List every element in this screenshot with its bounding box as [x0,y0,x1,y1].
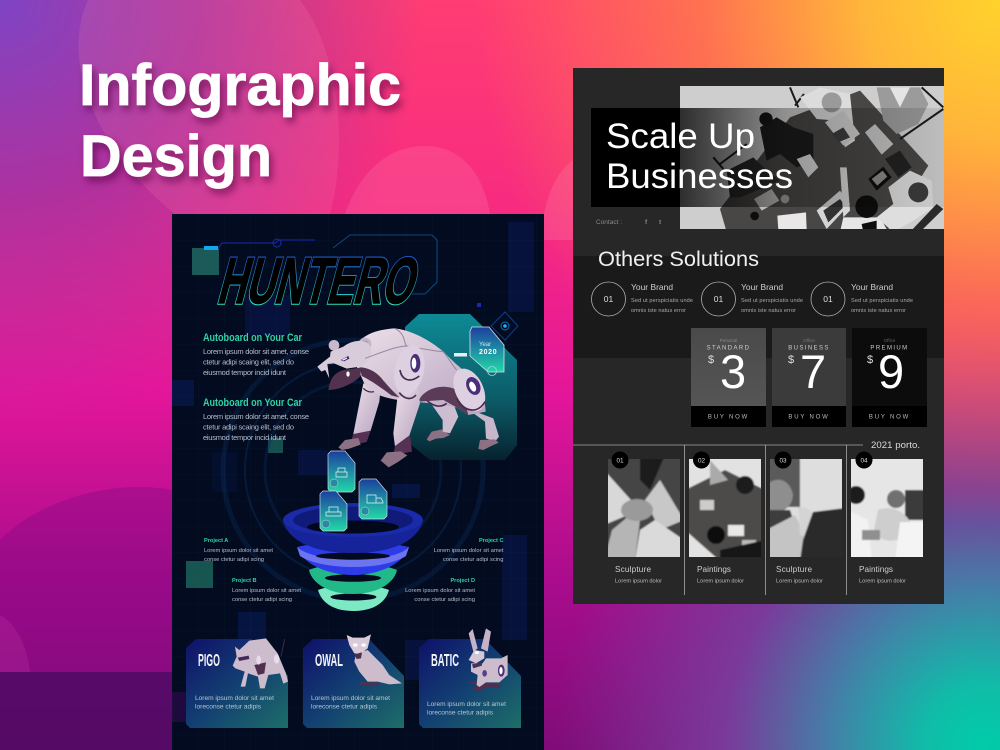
year tag [454,327,504,376]
card: Batic: Lorem ipsum dolor sit amet [427,701,506,708]
photo: high five [770,459,842,557]
badge 03 [774,452,792,468]
brand item two [702,282,803,316]
price card: premium [852,328,927,427]
price card: business: BUY NOW [788,414,830,420]
project A: Lorem ipsum dolor sit amet [204,548,273,554]
text block: autoboard two: ctetur adipi scaing elit, sed do [203,422,294,432]
price card: business: $ [788,354,794,366]
brand item two: 01 [714,294,723,304]
contact row: Contact : [596,219,622,226]
caption 1: Sculpture [615,565,651,574]
portfolio rule and label: 2021 porto. [871,440,920,451]
icon: robot owl [347,634,402,685]
hexagon behind bear [405,314,517,460]
brand item two: Sed ut perspiciatis unde [741,298,803,304]
badge 04: 04 [860,458,868,464]
project D: conse ctetur adipi scing [414,597,475,603]
brand item one: Sed ut perspiciatis unde [631,298,693,304]
brand item three [811,282,913,316]
card: Batic: BATIC [431,650,459,670]
price card: business [772,328,846,427]
icon: file card one [328,451,355,492]
title [79,53,401,189]
heading: HUNTERO: HUNTERO [212,245,427,318]
price card: business: 7 [800,345,826,398]
price card: premium: PREMIUM [870,346,909,352]
text block: autoboard one: Autoboard on Your Car [203,332,302,344]
project D: Project D [450,578,475,584]
price card: standard: BUY NOW [708,414,749,420]
icon: file card two [359,479,387,519]
caption 3: Lorem ipsum dolor [776,578,823,584]
title frame lines [204,235,437,294]
card: Batic: loreconse ctetur adipis [427,710,494,716]
price card: business: Office [803,338,815,343]
price card: standard: $ [708,354,714,366]
icon: file card three [320,491,347,531]
badge 02: 02 [698,458,705,464]
card: Owal [303,634,404,728]
project C: conse ctetur adipi scing [443,557,504,563]
brand item one: omnis iste natus error [631,308,686,314]
caption 1 [615,565,662,584]
price card: premium: $ [867,354,873,366]
text block: autoboard one: eiusmod tempor incid idunt [203,368,287,377]
text block: autoboard one: Lorem ipsum dolor sit amet, conse [203,347,309,356]
brand item three: Sed ut perspiciatis unde [851,298,913,304]
project B: Project B [232,578,257,584]
photo: office meeting [851,459,923,557]
photo: hands [608,459,680,557]
heading: Scale Up Businesses: Businesses [606,157,793,196]
icon: robot bear [317,328,499,467]
price card: standard: STANDARD [707,346,750,352]
panel: Scale Up Businesses [573,68,944,604]
project C: Project C [479,538,504,544]
project A [204,538,273,563]
project D: Lorem ipsum dolor sit amet [405,588,475,594]
caption 2: Lorem ipsum dolor [697,578,744,584]
contact row: t [659,219,662,226]
caption 1: Lorem ipsum dolor [615,578,662,584]
project B [232,578,301,603]
price card: premium: 9 [878,345,904,398]
card: Pigo: PIGO [198,650,220,670]
card: Pigo: loreconse ctetur adipis [195,704,262,710]
badge 01 [612,452,628,468]
heading: Scale Up Businesses: Scale Up [606,117,755,156]
brand item one: Your Brand [631,282,673,292]
brand item three: 01 [823,294,833,304]
caption 4 [859,565,906,584]
icon: robot rabbit [468,628,508,691]
heading: Others Solutions: Others Solutions [598,248,759,271]
price card: premium: BUY NOW [869,414,910,420]
text block: autoboard two: eiusmod tempor incid idunt [203,433,287,442]
text block: autoboard two [203,397,309,442]
price card: standard: Personal [720,338,737,343]
card: Owal: OWAL [315,650,343,670]
badge 02 [693,452,710,468]
portfolio rule and label [573,440,920,595]
text block: autoboard two: Autoboard on Your Car [203,397,302,409]
heading: Scale Up Businesses [606,117,793,196]
badge 04 [856,452,872,468]
brand item one: 01 [604,294,613,304]
target icon [477,303,518,340]
caption 4: Paintings [859,565,893,574]
year tag: Year [479,342,491,348]
caption 4: Lorem ipsum dolor [859,578,906,584]
caption 3: Sculpture [776,565,812,574]
project C: Lorem ipsum dolor sit amet [434,548,504,554]
contact row: f [645,219,648,226]
year tag: 2020 [479,349,497,356]
heading: HUNTERO [217,256,418,306]
price card: standard: 3 [720,345,746,398]
caption 3 [776,565,823,584]
brand item two: omnis iste natus error [741,308,796,314]
badge 03: 03 [779,458,787,464]
card: Owal: loreconse ctetur adipis [311,704,378,710]
caption 2 [697,565,744,584]
caption 2: Paintings [697,565,731,574]
card: Batic [419,628,521,728]
background blobs [0,0,573,750]
price card: business: BUSINESS [788,346,830,352]
card: Pigo: Lorem ipsum dolor sit amet [195,695,274,702]
project B: conse ctetur adipi scing [232,597,292,603]
title: Infographic [79,53,401,118]
card: Pigo [186,638,288,728]
icon: robot boar [233,638,288,688]
brand item two: Your Brand [741,282,783,292]
contact row [596,219,662,226]
price card: standard [691,328,766,427]
brand item three: Your Brand [851,282,893,292]
hero photo [680,86,944,232]
project B: Lorem ipsum dolor sit amet [232,588,301,594]
price card: premium: Office [884,338,896,343]
project D [405,578,475,603]
funnel [283,503,423,611]
text block: autoboard two: Lorem ipsum dolor sit amet, conse [203,412,309,421]
project A: conse ctetur adipi scing [204,557,264,563]
heading: HUNTERO: HUNTERO [212,245,427,318]
card: Owal: Lorem ipsum dolor sit amet [311,695,390,702]
text block: autoboard one [203,332,309,377]
brand item three: omnis iste natus error [851,308,906,314]
hero overlay band [680,108,944,207]
poster decorative blocks [172,214,544,750]
project C [434,538,504,563]
panel: Huntero poster [172,214,544,750]
title: Design [80,124,272,189]
project A: Project A [204,538,228,544]
text block: autoboard one: ctetur adipi scaing elit, sed do [203,358,294,366]
photo: table [689,459,761,557]
brand item one [592,282,693,316]
badge 01: 01 [616,458,624,464]
